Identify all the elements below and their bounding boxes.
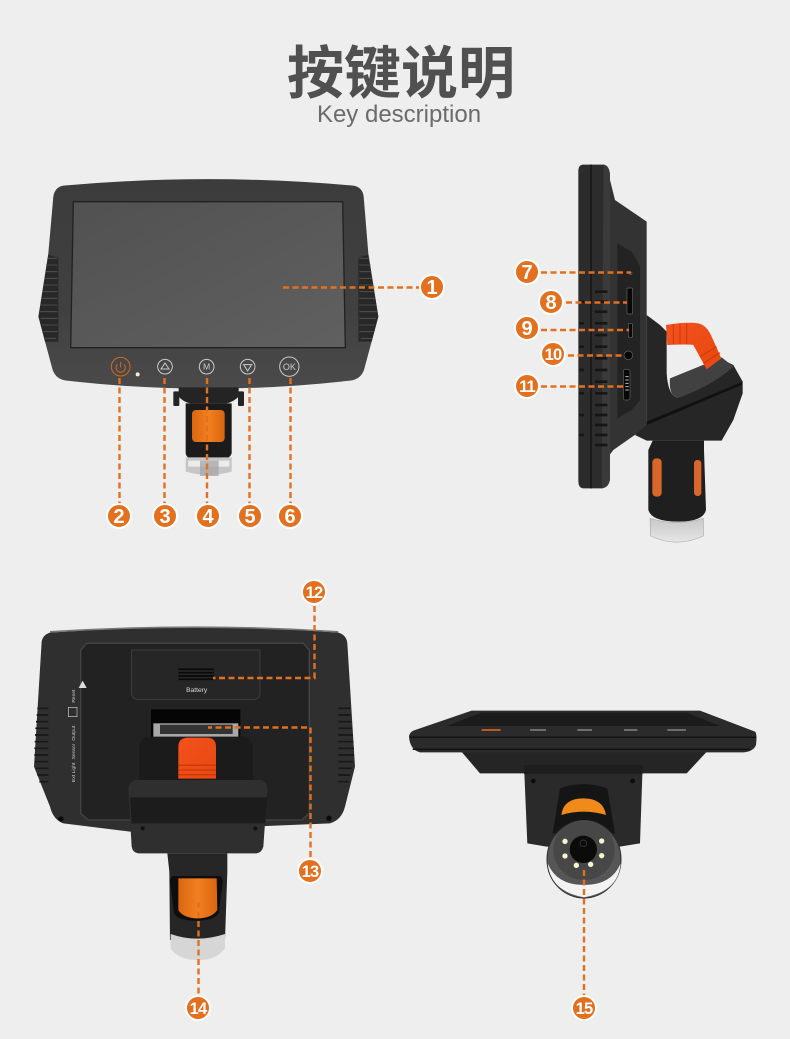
side ribs: [34, 708, 354, 782]
badge 12: 12: [306, 584, 323, 602]
badge 3: [153, 504, 177, 528]
orange strips: [652, 458, 662, 497]
ok button: [280, 357, 299, 376]
mount: [524, 765, 643, 847]
orange joint: [178, 738, 216, 779]
power button: [111, 357, 130, 376]
badge 4: 4: [202, 506, 214, 528]
badge 9: 9: [521, 318, 533, 340]
subtitle: Key description: [317, 101, 481, 128]
down button: [240, 359, 255, 374]
display edge: [409, 711, 756, 752]
badge 7: [515, 260, 539, 284]
leader line 4: [206, 378, 208, 505]
badge 4: [196, 504, 220, 528]
handle barrel: [648, 441, 706, 522]
grip ribs: [579, 292, 607, 445]
orange focus wheel: [561, 798, 606, 815]
badge 1: [420, 275, 444, 299]
badge 15: 15: [576, 1000, 593, 1018]
leader line 9: [541, 329, 629, 331]
side labels: Sensor: [71, 743, 77, 759]
leader line 14: [197, 902, 200, 995]
clear cap: [171, 934, 225, 960]
stand arm: [635, 315, 743, 441]
leader line 6: [289, 378, 292, 505]
rib lines: [40, 258, 377, 338]
side labels: Ext Light: [71, 762, 77, 782]
badge 1: 1: [426, 277, 438, 299]
stand bracket: [173, 387, 244, 406]
title: 按键说明: [287, 42, 515, 106]
leds: [562, 838, 604, 868]
battery cover: Battery: [186, 687, 208, 694]
badge 13: [298, 859, 322, 883]
badge 9: [515, 316, 539, 340]
leader line 3: [163, 378, 166, 505]
lens barrel: [553, 784, 615, 833]
badge 5: [238, 504, 262, 528]
badge 11: [515, 374, 539, 398]
body: [34, 627, 355, 832]
handle: [167, 853, 227, 940]
front bezel: [578, 165, 610, 488]
indicator light: [136, 372, 140, 376]
battery slot: [151, 709, 240, 739]
badge 2: [107, 504, 131, 528]
rear housing: [608, 180, 647, 457]
leader line 11: [541, 385, 624, 388]
rear view of device: [34, 626, 355, 960]
leader line 12: [213, 606, 314, 678]
leader line 10: [568, 354, 625, 357]
mode button: M: [203, 362, 210, 372]
leader line 13: [208, 728, 310, 857]
mount block: [128, 780, 267, 853]
badge 7: 7: [521, 262, 533, 284]
ports: [623, 272, 633, 400]
badge 8: [539, 290, 563, 314]
lens: [570, 836, 597, 863]
badge 15: [572, 996, 596, 1020]
back panel: [81, 643, 309, 820]
display body: [38, 179, 378, 389]
badge 10: 10: [545, 346, 562, 364]
side view of device: [578, 165, 743, 542]
mode button: [199, 359, 214, 374]
leader line 8: [566, 301, 627, 304]
button marks: [482, 727, 501, 733]
side labels: [68, 681, 87, 782]
top view of device: [409, 711, 756, 898]
glass cap: [547, 820, 621, 898]
front view of device: [38, 179, 378, 476]
badge 12: [302, 580, 326, 604]
red flexible joint: [666, 323, 721, 369]
badge 14: 14: [190, 1000, 208, 1018]
battery cover: [132, 650, 260, 700]
side labels: Output: [71, 725, 77, 741]
badge 10: [541, 342, 565, 366]
up button: [158, 359, 172, 374]
side labels: Reset: [71, 689, 77, 703]
orange dial: [178, 878, 217, 918]
leader line 7: [541, 271, 631, 274]
leader line 1: [283, 286, 420, 289]
badge 14: [186, 996, 210, 1020]
focus wheel: [192, 410, 225, 442]
port panel: [617, 243, 640, 418]
body wedge: [460, 750, 708, 773]
badge 5: 5: [244, 506, 256, 528]
leader line 5: [248, 378, 251, 505]
lens barrel: [186, 403, 232, 459]
screen: [71, 202, 345, 348]
ok button: OK: [283, 362, 296, 372]
badge 11: 11: [519, 378, 536, 396]
side grip ribs: [39, 255, 378, 342]
leader line 15: [583, 870, 585, 995]
badge 2: 2: [113, 506, 125, 528]
clear lens cap: [186, 457, 232, 475]
lens cap: [650, 518, 703, 542]
badge 8: 8: [545, 292, 557, 314]
arm: [139, 737, 253, 783]
leader line 2: [118, 378, 121, 505]
badge 3: 3: [159, 506, 171, 528]
badge 6: 6: [284, 506, 296, 528]
badge 6: [278, 504, 302, 528]
badge 13: 13: [302, 863, 319, 881]
scroll wheel teeth: [625, 377, 629, 390]
